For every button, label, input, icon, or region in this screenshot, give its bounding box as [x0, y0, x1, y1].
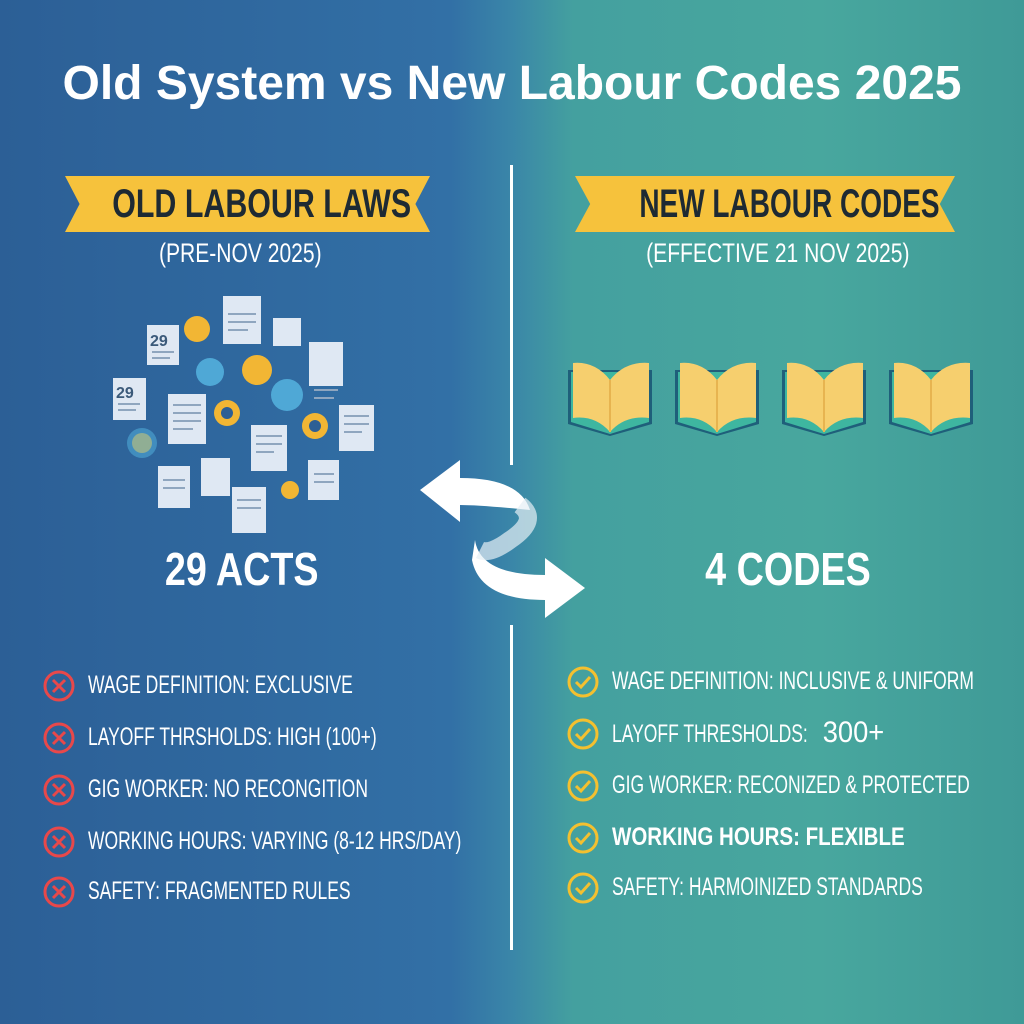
divider line — [510, 165, 513, 950]
banner: new labour codes: NEW LABOUR CODES — [639, 182, 940, 226]
item: 300+ — [822, 716, 884, 749]
banner: old labour laws — [65, 176, 430, 232]
heading: 4 codes: 4 CODES — [705, 543, 871, 595]
arrows: swap — [420, 460, 585, 618]
item: SAFETY: FRAGMENTED RULES — [88, 877, 351, 905]
item: WORKING HOURS: FLEXIBLE — [612, 823, 905, 851]
icon cluster: documents and gears — [113, 296, 374, 533]
item: GIG WORKER: NO RECONGITION — [88, 775, 368, 803]
item — [568, 716, 884, 750]
list: old system drawbacks — [44, 670, 461, 908]
subtitle: effective 21 nov 2025: (EFFECTIVE 21 NOV 2025) — [646, 238, 910, 268]
item: WORKING HOURS: VARYING (8-12 HRS/DAY) — [88, 827, 461, 855]
title: Old System vs New Labour Codes 2025 — [62, 57, 962, 110]
banner: old labour laws: OLD LABOUR LAWS — [112, 182, 411, 226]
item: SAFETY: HARMOINIZED STANDARDS — [612, 873, 923, 901]
icon cluster: documents and gears: 29 — [116, 385, 134, 402]
heading: 29 acts: 29 ACTS — [165, 543, 319, 595]
item: LAYOFF THRSHOLDS: HIGH (100+) — [88, 723, 377, 751]
item: WAGE DEFINITION: INCLUSIVE & UNIFORM — [612, 667, 974, 695]
item: LAYOFF THRESHOLDS: — [612, 720, 808, 748]
banner: new labour codes — [575, 176, 955, 232]
item: WAGE DEFINITION: EXCLUSIVE — [88, 671, 353, 699]
subtitle: pre-nov 2025: (PRE-NOV 2025) — [159, 238, 321, 268]
item: GIG WORKER: RECONIZED & PROTECTED — [612, 771, 970, 799]
books: 4 codes — [568, 362, 973, 436]
list: new codes benefits — [568, 666, 974, 904]
icon cluster: documents and gears: 29 — [150, 333, 168, 350]
